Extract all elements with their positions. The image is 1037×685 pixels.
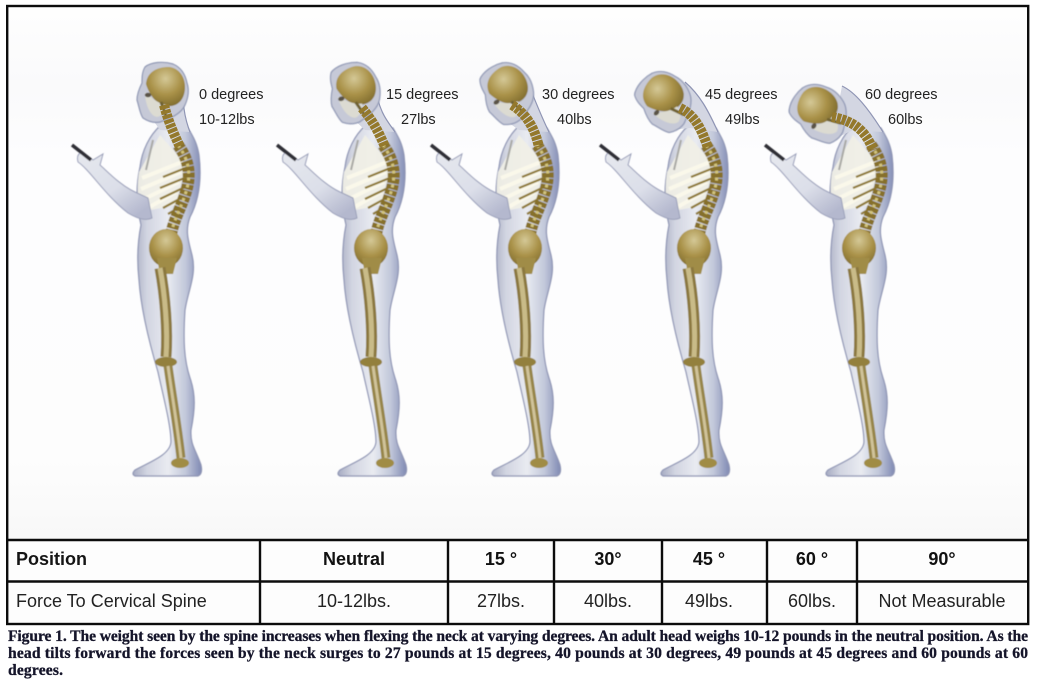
label: 30 degrees: 30 degrees bbox=[542, 87, 615, 103]
table row: position: 60 ° bbox=[796, 549, 828, 569]
head bbox=[137, 62, 188, 122]
cervical spine bbox=[164, 105, 180, 147]
label: 30 degrees: 40lbs bbox=[557, 112, 592, 128]
table row: force to cervical spine: Not Measurable bbox=[878, 591, 1006, 611]
label: 45 degrees bbox=[705, 87, 778, 128]
label: 30 degrees bbox=[542, 87, 615, 128]
table row: position: 90° bbox=[928, 549, 956, 569]
label: 15 degrees bbox=[386, 87, 459, 128]
figure 1: 0 degrees bbox=[72, 62, 202, 476]
table row: position: 45 ° bbox=[693, 549, 725, 569]
figure 3: 30 degrees bbox=[431, 54, 561, 476]
cervical spine bbox=[362, 108, 385, 147]
body and arm bbox=[431, 126, 561, 476]
table row: position: Position bbox=[16, 549, 87, 569]
neck bbox=[832, 86, 883, 140]
body and arm bbox=[277, 126, 407, 476]
cervical spine bbox=[832, 117, 873, 150]
table row: force to cervical spine: 27lbs. bbox=[477, 591, 525, 611]
label: 60 degrees bbox=[865, 87, 938, 128]
figure caption: head tilts forward the forces seen by the neck surges to 27 pounds at 15 degrees, 40 pounds at 30 degrees, 49 pounds at 45 degrees and 60 pounds at 60 bbox=[8, 645, 1028, 662]
figure 4: 45 degrees bbox=[600, 61, 730, 476]
table row: force to cervical spine: 60lbs. bbox=[788, 591, 836, 611]
label: 0 degrees bbox=[199, 87, 264, 128]
head bbox=[471, 54, 545, 131]
head bbox=[626, 61, 704, 140]
label: 0 degrees: 0 degrees bbox=[199, 87, 264, 103]
neck bbox=[150, 100, 190, 132]
table row: position: Neutral bbox=[323, 549, 385, 569]
label: 60 degrees: 60 degrees bbox=[865, 87, 938, 103]
label: 45 degrees: 45 degrees bbox=[705, 87, 778, 103]
neck bbox=[350, 100, 395, 132]
body and arm bbox=[600, 126, 730, 476]
label: 45 degrees: 49lbs bbox=[725, 112, 760, 128]
figure caption: Figure 1. The weight seen by the spine increases when flexing the neck at varying degrees. An adult head weighs 10-12 pounds in the neutral position. As the bbox=[8, 628, 1028, 645]
label: 15 degrees: 27lbs bbox=[401, 112, 436, 128]
table row: force to cervical spine: 40lbs. bbox=[584, 591, 632, 611]
head bbox=[781, 74, 859, 151]
cervical spine bbox=[680, 108, 708, 148]
photo panel background bbox=[8, 7, 1028, 539]
neck bbox=[668, 82, 718, 132]
figure caption bbox=[8, 628, 1028, 679]
table row: force to cervical spine: 49lbs. bbox=[685, 591, 733, 611]
neck bbox=[502, 88, 549, 132]
figure 2: 15 degrees bbox=[277, 57, 407, 476]
body and arm bbox=[72, 126, 202, 476]
figure 5: 60 degrees bbox=[765, 74, 895, 476]
table row: force to cervical spine: 10-12lbs. bbox=[317, 591, 391, 611]
label: 0 degrees: 10-12lbs bbox=[199, 112, 255, 128]
table row: position: 15 ° bbox=[485, 549, 517, 569]
body and arm bbox=[765, 126, 895, 476]
label: 60 degrees: 60lbs bbox=[888, 112, 923, 128]
label: 15 degrees: 15 degrees bbox=[386, 87, 459, 103]
table row: force to cervical spine bbox=[16, 591, 1006, 611]
figure caption: degrees. bbox=[8, 662, 63, 679]
head bbox=[322, 57, 387, 128]
table row: force to cervical spine: Force To Cervical Spine bbox=[16, 591, 207, 611]
cervical spine bbox=[512, 105, 539, 147]
table row: position: 30° bbox=[594, 549, 622, 569]
table row: position bbox=[16, 549, 956, 569]
